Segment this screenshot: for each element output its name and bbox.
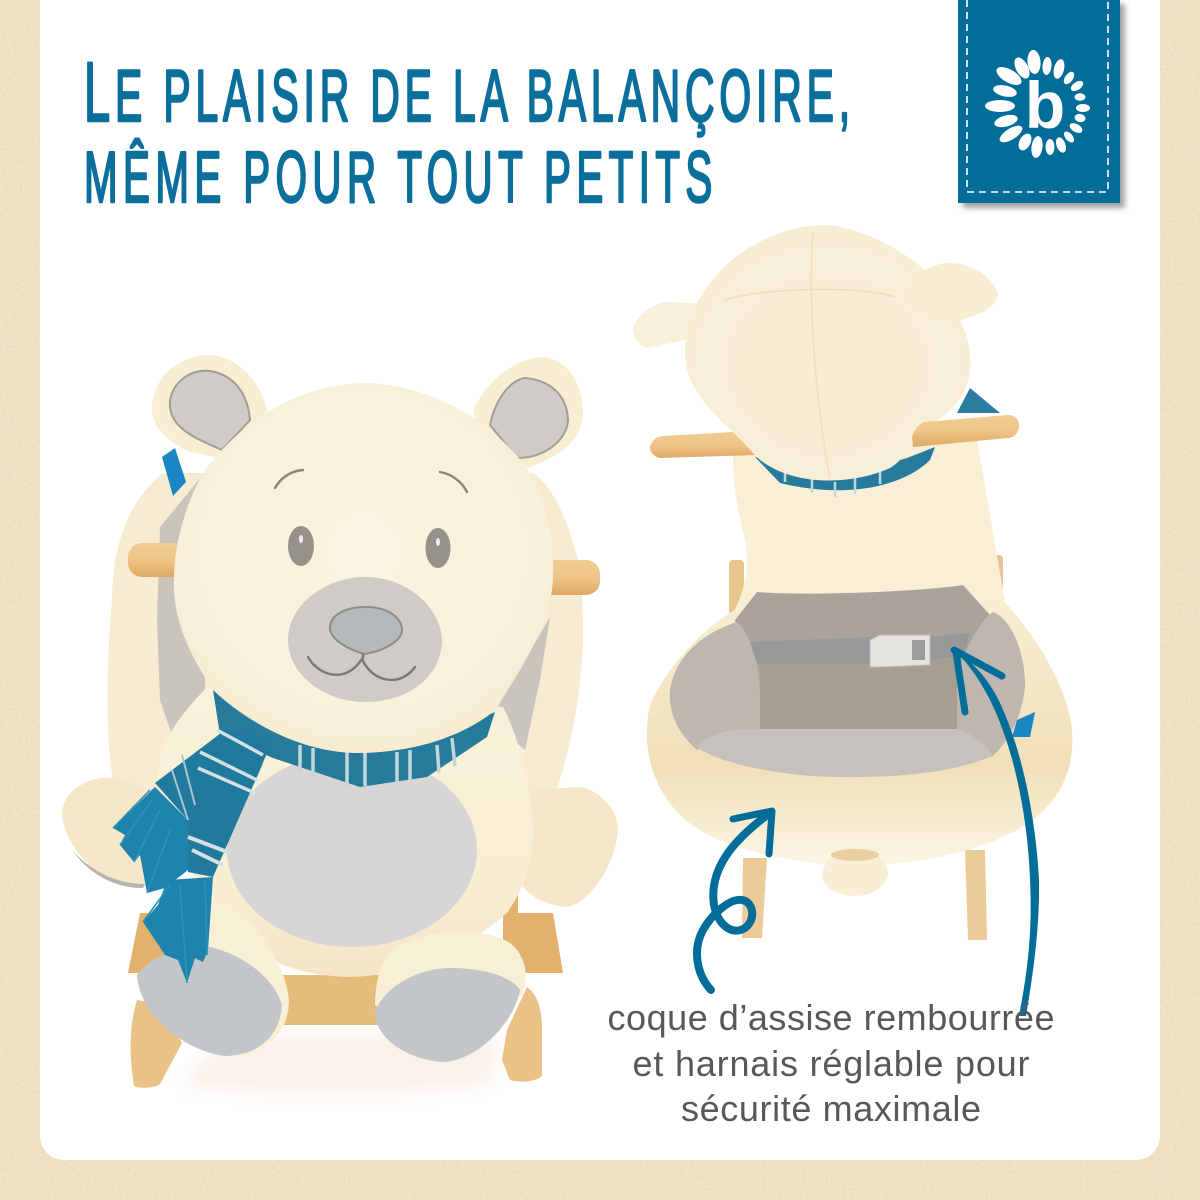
- caption: sécurité maximale: [681, 1088, 981, 1129]
- seat side pads: [670, 622, 760, 750]
- caption: coque d’assise rembourrée: [608, 997, 1054, 1038]
- floor shadow: [180, 1035, 500, 1094]
- seat back: [107, 473, 583, 810]
- head: [174, 383, 553, 753]
- photo: bear rocker back view: [633, 225, 1072, 940]
- front cushion: [697, 729, 992, 777]
- ears: [633, 302, 723, 348]
- title: MÊME POUR TOUT PETITS: [84, 138, 712, 218]
- blue tag: [162, 448, 186, 496]
- wooden handles: [650, 432, 756, 458]
- caption: et harnais réglable pour: [632, 1043, 1030, 1084]
- badge: brand logo label: [958, 0, 1125, 208]
- eyes: [288, 526, 314, 566]
- blue tag: [1012, 712, 1035, 737]
- harness: [750, 633, 970, 667]
- arrow: long to harness: [952, 648, 1039, 1016]
- torso: [730, 430, 1005, 620]
- back of head: [685, 225, 970, 480]
- scarf band: [755, 447, 935, 490]
- logo letter: b: [1025, 68, 1065, 142]
- nose: [330, 607, 402, 654]
- seat padding back: [735, 585, 990, 735]
- caption: [608, 997, 1054, 1129]
- side paws: [62, 778, 180, 888]
- scarf behind: [957, 388, 1000, 413]
- title: [84, 46, 850, 218]
- tail: [822, 850, 888, 896]
- scarf tail and fringe: [113, 730, 273, 983]
- ears: [152, 355, 267, 460]
- seat shell: [647, 600, 1072, 867]
- wooden legs: [742, 858, 767, 938]
- title: LE PLAISIR DE LA BALANÇOIRE,: [84, 46, 850, 140]
- arrow: short curl to seat shell: [697, 811, 772, 990]
- belly: [227, 753, 477, 947]
- legs and soles: [160, 897, 289, 1056]
- photo: bear rocker front view: [62, 355, 618, 1094]
- muzzle: [288, 577, 442, 702]
- wooden handle right: [912, 415, 1019, 447]
- body: [158, 687, 533, 977]
- icon: flower logo: [985, 49, 1090, 159]
- scarf band: [213, 690, 495, 787]
- wooden handles: [128, 543, 198, 577]
- wooden rocker base: [128, 895, 563, 1088]
